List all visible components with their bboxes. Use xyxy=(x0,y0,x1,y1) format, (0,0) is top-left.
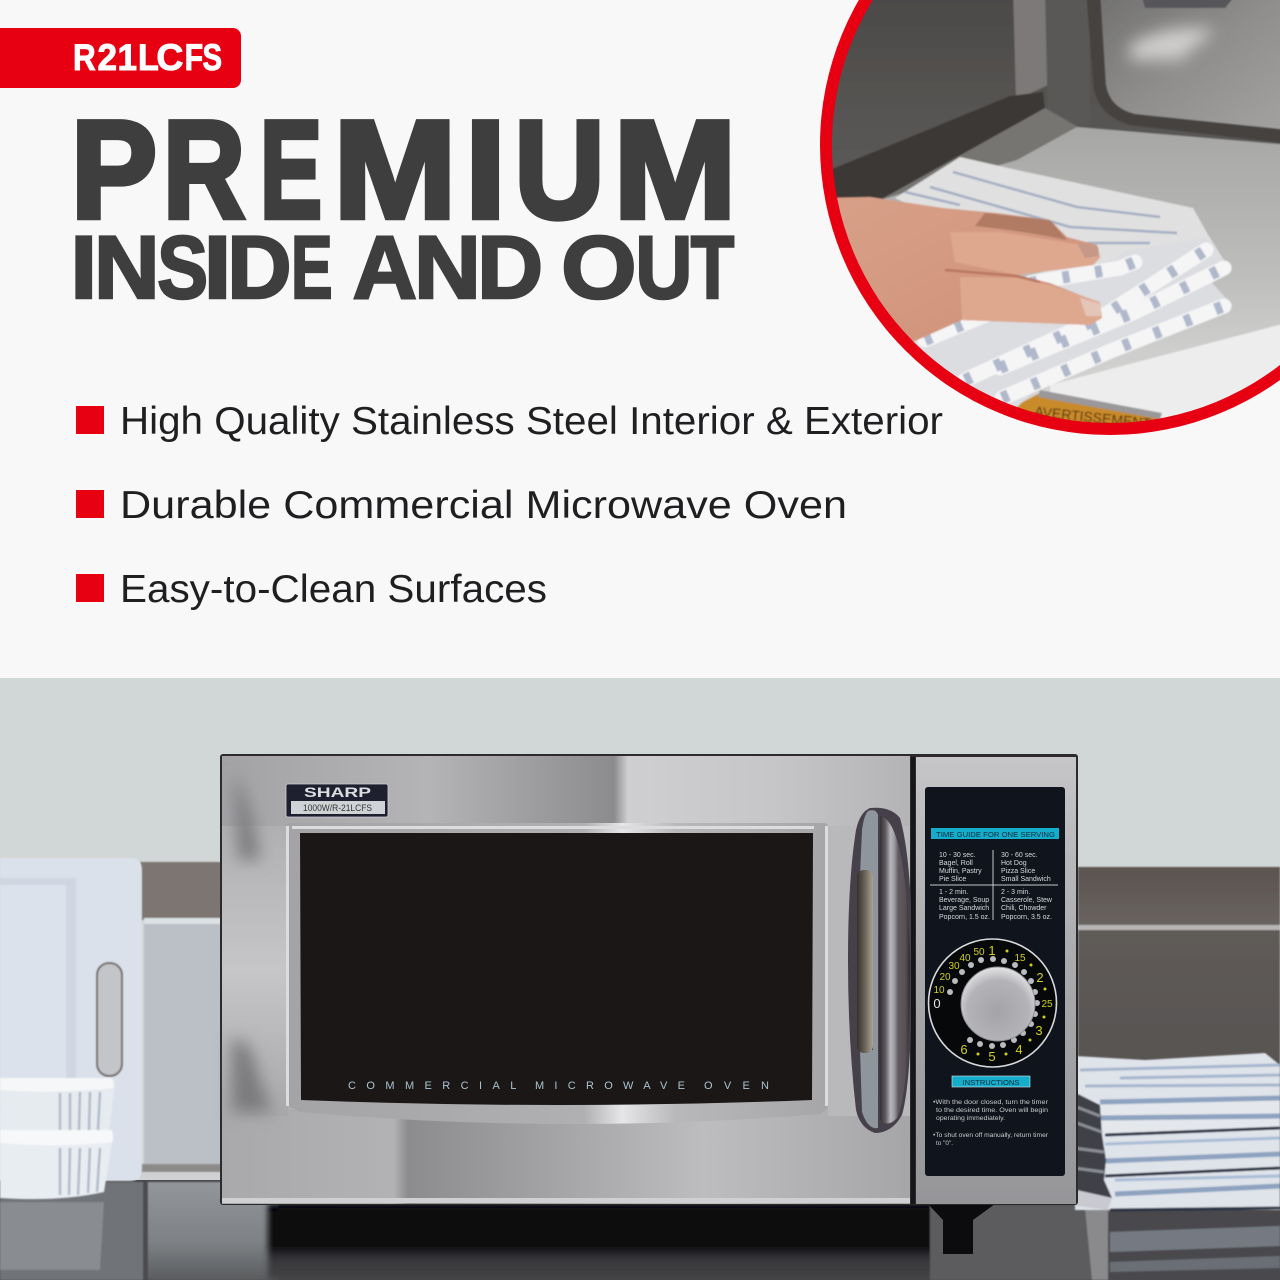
door handle xyxy=(848,808,912,1133)
body and door xyxy=(220,754,1078,1205)
title: E xyxy=(260,92,322,248)
timer guide panel: 30 - 60 sec. xyxy=(1001,852,1038,859)
brand plate: 1000W/R-21LCFS xyxy=(303,803,372,814)
title xyxy=(70,92,737,317)
timer guide panel: Small Sandwich xyxy=(1001,876,1051,883)
timer dial: 2 xyxy=(1036,970,1044,985)
model badge: L xyxy=(138,37,159,78)
timer dial: 50 xyxy=(973,947,985,958)
instructions: •With the door closed, turn the timer xyxy=(933,1099,1049,1106)
model badge: 2 xyxy=(98,37,117,78)
timer guide panel: Pie Slice xyxy=(939,876,966,883)
timer dial: 20 xyxy=(939,972,951,983)
timer guide panel: TIME GUIDE FOR ONE SERVING xyxy=(936,830,1055,839)
timer guide panel: Pizza Slice xyxy=(1001,868,1035,875)
timer dial: 4 xyxy=(1015,1042,1023,1057)
timer guide panel: 10 - 30 sec. xyxy=(939,852,976,859)
bullet 2: Durable Commercial Microwave Oven xyxy=(120,484,847,527)
timer dial: 15 xyxy=(1014,953,1026,964)
model badge: C xyxy=(156,37,183,78)
title: N xyxy=(414,217,481,317)
title: U xyxy=(635,217,692,317)
title: N xyxy=(94,217,160,317)
bullet 1: High Quality Stainless Steel Interior & Exterior xyxy=(120,400,943,443)
timer guide panel: Casserole, Stew xyxy=(1001,897,1053,904)
model badge: S xyxy=(202,37,222,78)
timer dial: 6 xyxy=(960,1042,968,1057)
title: I xyxy=(70,217,97,317)
timer guide panel: Bagel, Roll xyxy=(939,860,973,867)
microwave oven xyxy=(220,754,1078,1254)
model badge: F xyxy=(185,37,203,78)
timer dial: 40 xyxy=(959,953,971,964)
control panel xyxy=(916,757,1076,1204)
timer guide panel: Popcorn, 1.5 oz. xyxy=(939,914,990,921)
icon: striped towel xyxy=(895,157,1232,407)
timer guide panel: Muffin, Pastry xyxy=(939,868,982,875)
timer guide panel: Large Sandwich xyxy=(939,905,989,912)
instructions: to "0". xyxy=(936,1140,953,1147)
timer guide panel: Hot Dog xyxy=(1001,860,1027,867)
timer dial: 3 xyxy=(1035,1023,1043,1038)
page background xyxy=(0,0,1280,678)
cutting board xyxy=(0,858,142,1181)
title: T xyxy=(691,217,734,317)
timer dial: 1 xyxy=(988,943,996,958)
window caption: OVEN xyxy=(704,1080,769,1092)
circular photo: hand wiping interior: AVERTISSEMENT xyxy=(1034,403,1152,431)
title: D xyxy=(477,217,543,317)
title: S xyxy=(157,217,208,317)
timer guide panel: Beverage, Soup xyxy=(939,897,989,904)
model badge: R xyxy=(73,37,96,78)
instructions: INSTRUCTIONS xyxy=(963,1078,1019,1087)
instructions xyxy=(933,1076,1049,1147)
title: M xyxy=(614,92,736,248)
timer dial: 0 xyxy=(933,996,941,1011)
timer dial: 25 xyxy=(1041,999,1053,1010)
model badge: 1 xyxy=(118,37,137,78)
timer dial: 30 xyxy=(948,961,960,972)
timer guide panel xyxy=(925,787,1065,1176)
instructions: to the desired time. Oven will begin xyxy=(936,1107,1048,1114)
title: U xyxy=(514,92,604,248)
title: A xyxy=(353,217,417,317)
model badge xyxy=(0,28,241,88)
timer guide panel: Popcorn, 3.5 oz. xyxy=(1001,914,1052,921)
title: D xyxy=(227,217,292,317)
bullet 3: Easy-to-Clean Surfaces xyxy=(120,568,547,611)
icon: hand xyxy=(825,197,1102,342)
timer dial: 10 xyxy=(933,985,945,996)
window caption: MICROWAVE xyxy=(535,1080,685,1092)
brand plate xyxy=(286,784,388,817)
title: O xyxy=(561,217,637,317)
door window frame xyxy=(286,823,828,1124)
feature list xyxy=(76,400,943,611)
title: R xyxy=(163,92,245,248)
circular photo: hand wiping interior xyxy=(820,0,1280,440)
window caption: COMMERCIAL xyxy=(348,1080,516,1092)
instructions: operating immediately. xyxy=(936,1115,1005,1122)
timer guide panel: 2 - 3 min. xyxy=(1001,889,1030,896)
brand plate: SHARP xyxy=(304,784,371,800)
timer dial: 5 xyxy=(988,1049,996,1064)
ramekins xyxy=(0,1078,115,1270)
title: E xyxy=(291,217,333,317)
timer dial xyxy=(928,939,1056,1067)
title: I xyxy=(465,92,506,248)
kitchen scene background xyxy=(0,678,1280,1280)
door separator xyxy=(911,757,915,1204)
title: M xyxy=(334,92,456,248)
title: P xyxy=(71,92,157,248)
timer guide panel: 1 - 2 min. xyxy=(939,889,968,896)
counter xyxy=(0,1180,1280,1280)
timer guide panel: Chili, Chowder xyxy=(1001,905,1047,912)
foot xyxy=(928,1204,995,1254)
instructions: •To shut oven off manually, return timer xyxy=(933,1132,1049,1139)
title: I xyxy=(204,217,232,317)
stacked towels xyxy=(1074,1053,1280,1210)
